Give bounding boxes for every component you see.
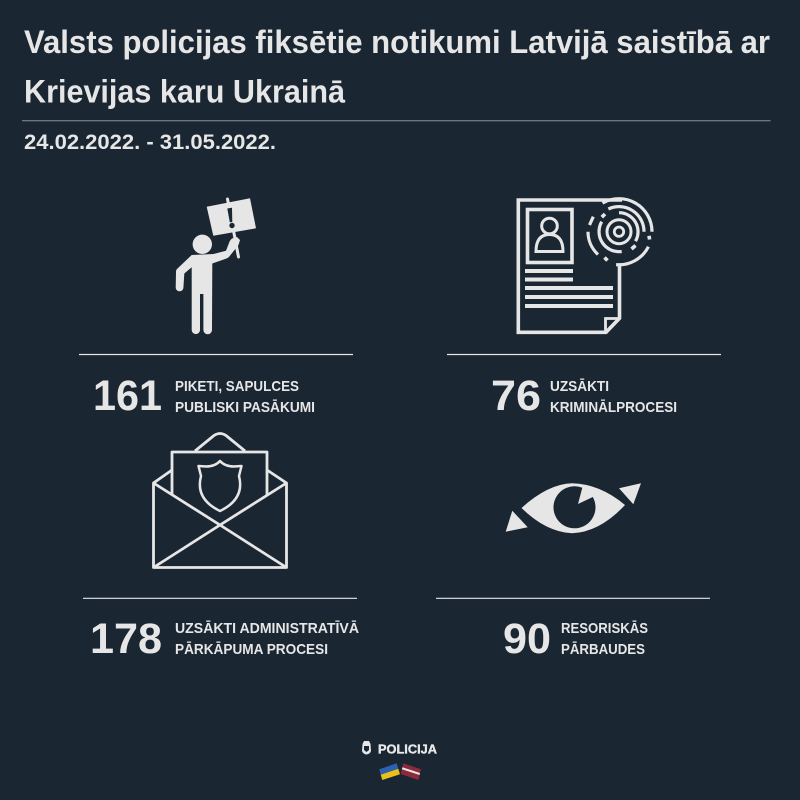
stat: 90 departmental checks: 90 bbox=[503, 615, 551, 663]
stat: 161 pickets: 161 bbox=[93, 372, 162, 420]
stat: 178 administrative proceedings bbox=[90, 615, 359, 663]
stat: 76 criminal proceedings: UZSĀKTI bbox=[550, 378, 609, 395]
icon: protester with sign bbox=[176, 198, 256, 334]
stat: 76 criminal proceedings: KRIMINĀLPROCESI bbox=[550, 399, 677, 416]
stat: 161 pickets bbox=[93, 372, 315, 420]
stat: 90 departmental checks bbox=[503, 615, 648, 663]
title: Krievijas karu Ukrainā bbox=[24, 74, 345, 110]
stat: 90 departmental checks: PĀRBAUDES bbox=[561, 641, 645, 658]
icon: envelope with police shield bbox=[154, 434, 286, 568]
stat: 90 departmental checks: RESORISKĀS bbox=[561, 620, 648, 637]
stat: 178 administrative proceedings: PĀRKĀPUMA PROCESI bbox=[175, 641, 328, 658]
logo: police crest and wordmark: POLICIJA bbox=[378, 742, 438, 756]
icon: document with fingerprint bbox=[518, 199, 652, 332]
stat: 76 criminal proceedings: 76 bbox=[491, 372, 541, 420]
stat: 178 administrative proceedings: UZSĀKTI ADMINISTRATĪVĀ bbox=[175, 620, 359, 637]
title bbox=[24, 24, 770, 110]
stat: 178 administrative proceedings: 178 bbox=[90, 615, 162, 663]
stat: 76 criminal proceedings bbox=[491, 372, 677, 420]
icon: eye bbox=[506, 483, 641, 533]
flags: Ukraine and Latvia bbox=[379, 763, 421, 780]
stat: 161 pickets: PIKETI, SAPULCES bbox=[175, 378, 299, 395]
stat: 161 pickets: PUBLISKI PASĀKUMI bbox=[175, 399, 315, 416]
title: Valsts policijas fiksētie notikumi Latvijā saistībā ar bbox=[24, 24, 770, 60]
date range: 24.02.2022. - 31.05.2022. bbox=[24, 130, 276, 154]
